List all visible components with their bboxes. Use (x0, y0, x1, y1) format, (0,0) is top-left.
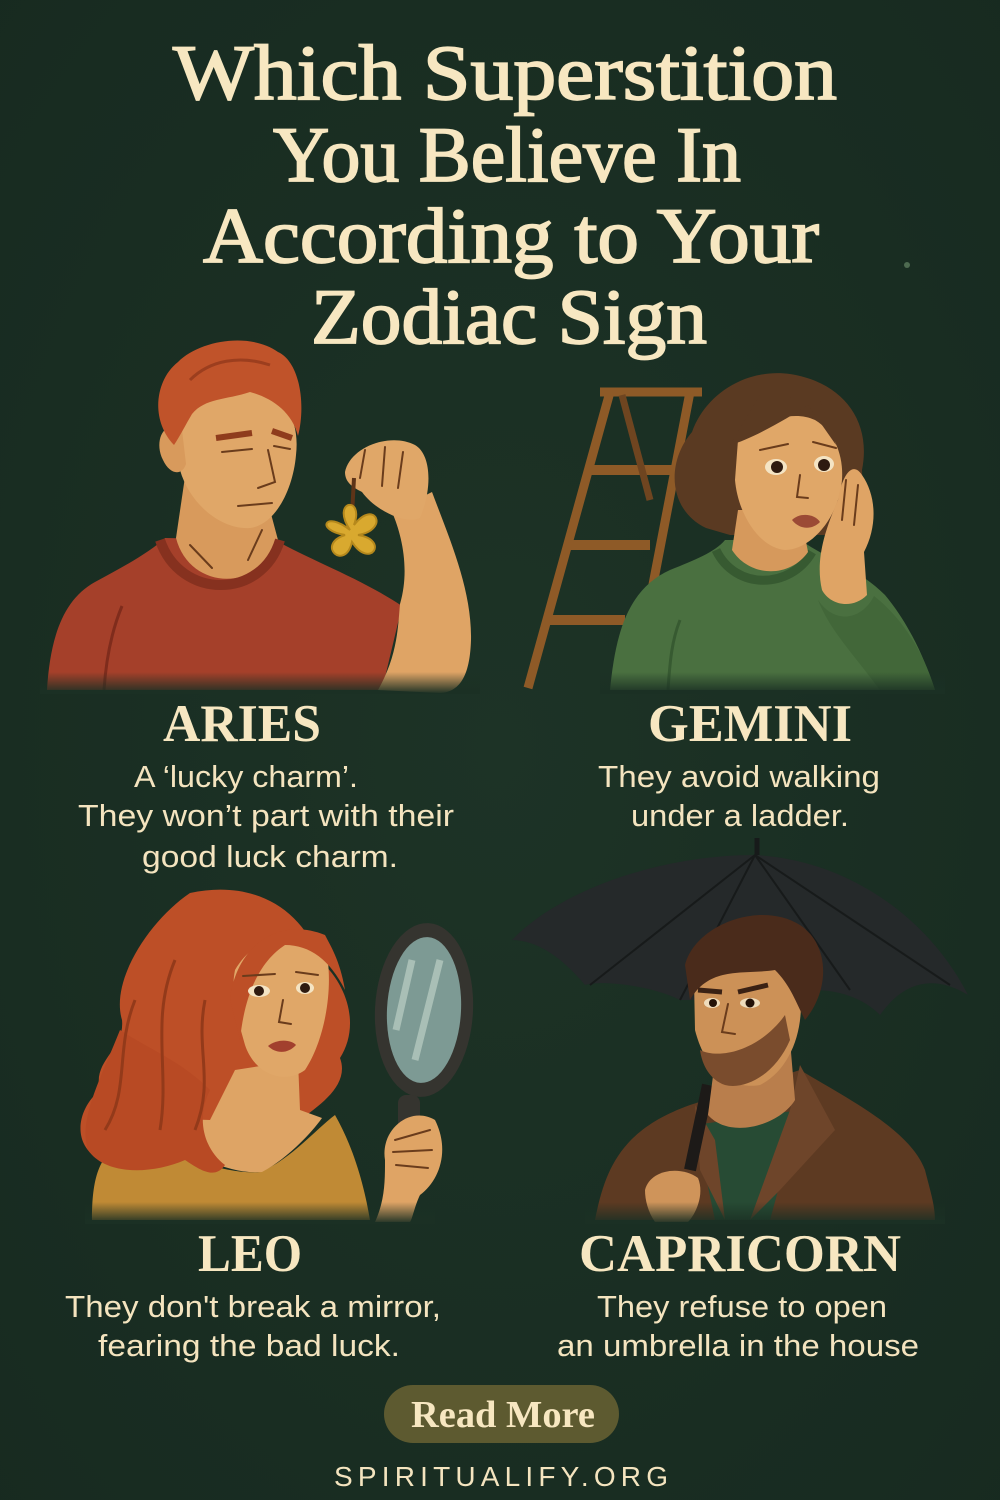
hand (345, 440, 428, 520)
ear (159, 427, 186, 472)
umbrella (512, 855, 968, 1015)
eyes (765, 459, 787, 475)
hand (820, 469, 874, 604)
top (92, 1115, 370, 1220)
neck (176, 470, 278, 579)
front hair strands (86, 1030, 225, 1173)
face (233, 935, 329, 1077)
text: Capricorn description (557, 1289, 919, 1363)
illustration: Leo woman with mirror (80, 890, 477, 1224)
title: Zodiac Sign (311, 273, 707, 360)
neck (732, 510, 808, 571)
heading: Capricorn: CAPRICORN (579, 1225, 901, 1283)
hair (675, 373, 864, 535)
title: Which Superstition (173, 29, 837, 116)
title (173, 29, 837, 360)
shirt (47, 538, 402, 690)
hand (645, 1171, 700, 1222)
neck (708, 1040, 795, 1128)
face (175, 387, 297, 528)
icon: hand mirror (371, 921, 477, 1222)
text: Aries description: They won’t part with their (78, 798, 454, 833)
footer: website: SPIRITUALIFY.ORG (334, 1461, 668, 1492)
text: Aries description: good luck charm. (142, 839, 398, 874)
text: Aries description (78, 759, 454, 874)
face (694, 955, 801, 1086)
illustration: Capricorn man under umbrella (512, 838, 968, 1224)
text: Capricorn description: an umbrella in the house (557, 1328, 919, 1363)
title: You Believe In (273, 111, 741, 198)
hair (158, 341, 301, 445)
text: Leo description: They don't break a mirror, (65, 1289, 441, 1324)
face (735, 416, 842, 550)
illustration: Gemini woman and ladder (528, 373, 945, 694)
arm (378, 492, 471, 693)
hair (685, 915, 823, 1020)
eye and brow (222, 446, 290, 452)
text: Gemini description: They avoid walking (598, 759, 880, 794)
title: According to Your (203, 192, 819, 279)
text: Gemini description (598, 759, 880, 833)
umbrella handle (690, 1085, 708, 1170)
button: Read More: Read More (411, 1394, 595, 1436)
eyes (248, 985, 270, 997)
ladder (528, 392, 702, 688)
jacket (595, 1070, 935, 1220)
sweater (610, 540, 935, 690)
back hair (80, 890, 350, 1176)
text: Leo description: fearing the bad luck. (98, 1328, 400, 1363)
button: Read More (384, 1385, 619, 1443)
heading: Leo: LEO (198, 1225, 302, 1283)
heading: Gemini: GEMINI (648, 695, 852, 753)
heading: Aries: ARIES (163, 695, 321, 753)
text: Capricorn description: They refuse to open (597, 1289, 887, 1324)
neck and chest (150, 1060, 322, 1172)
illustration: Aries man with lucky charm (40, 341, 480, 694)
icon: four-leaf clover charm (326, 478, 376, 556)
text: Leo description (65, 1289, 441, 1363)
text: Aries description: A ‘lucky charm’. (134, 759, 358, 794)
text: Gemini description: under a ladder. (631, 798, 849, 833)
eyes (704, 998, 720, 1008)
